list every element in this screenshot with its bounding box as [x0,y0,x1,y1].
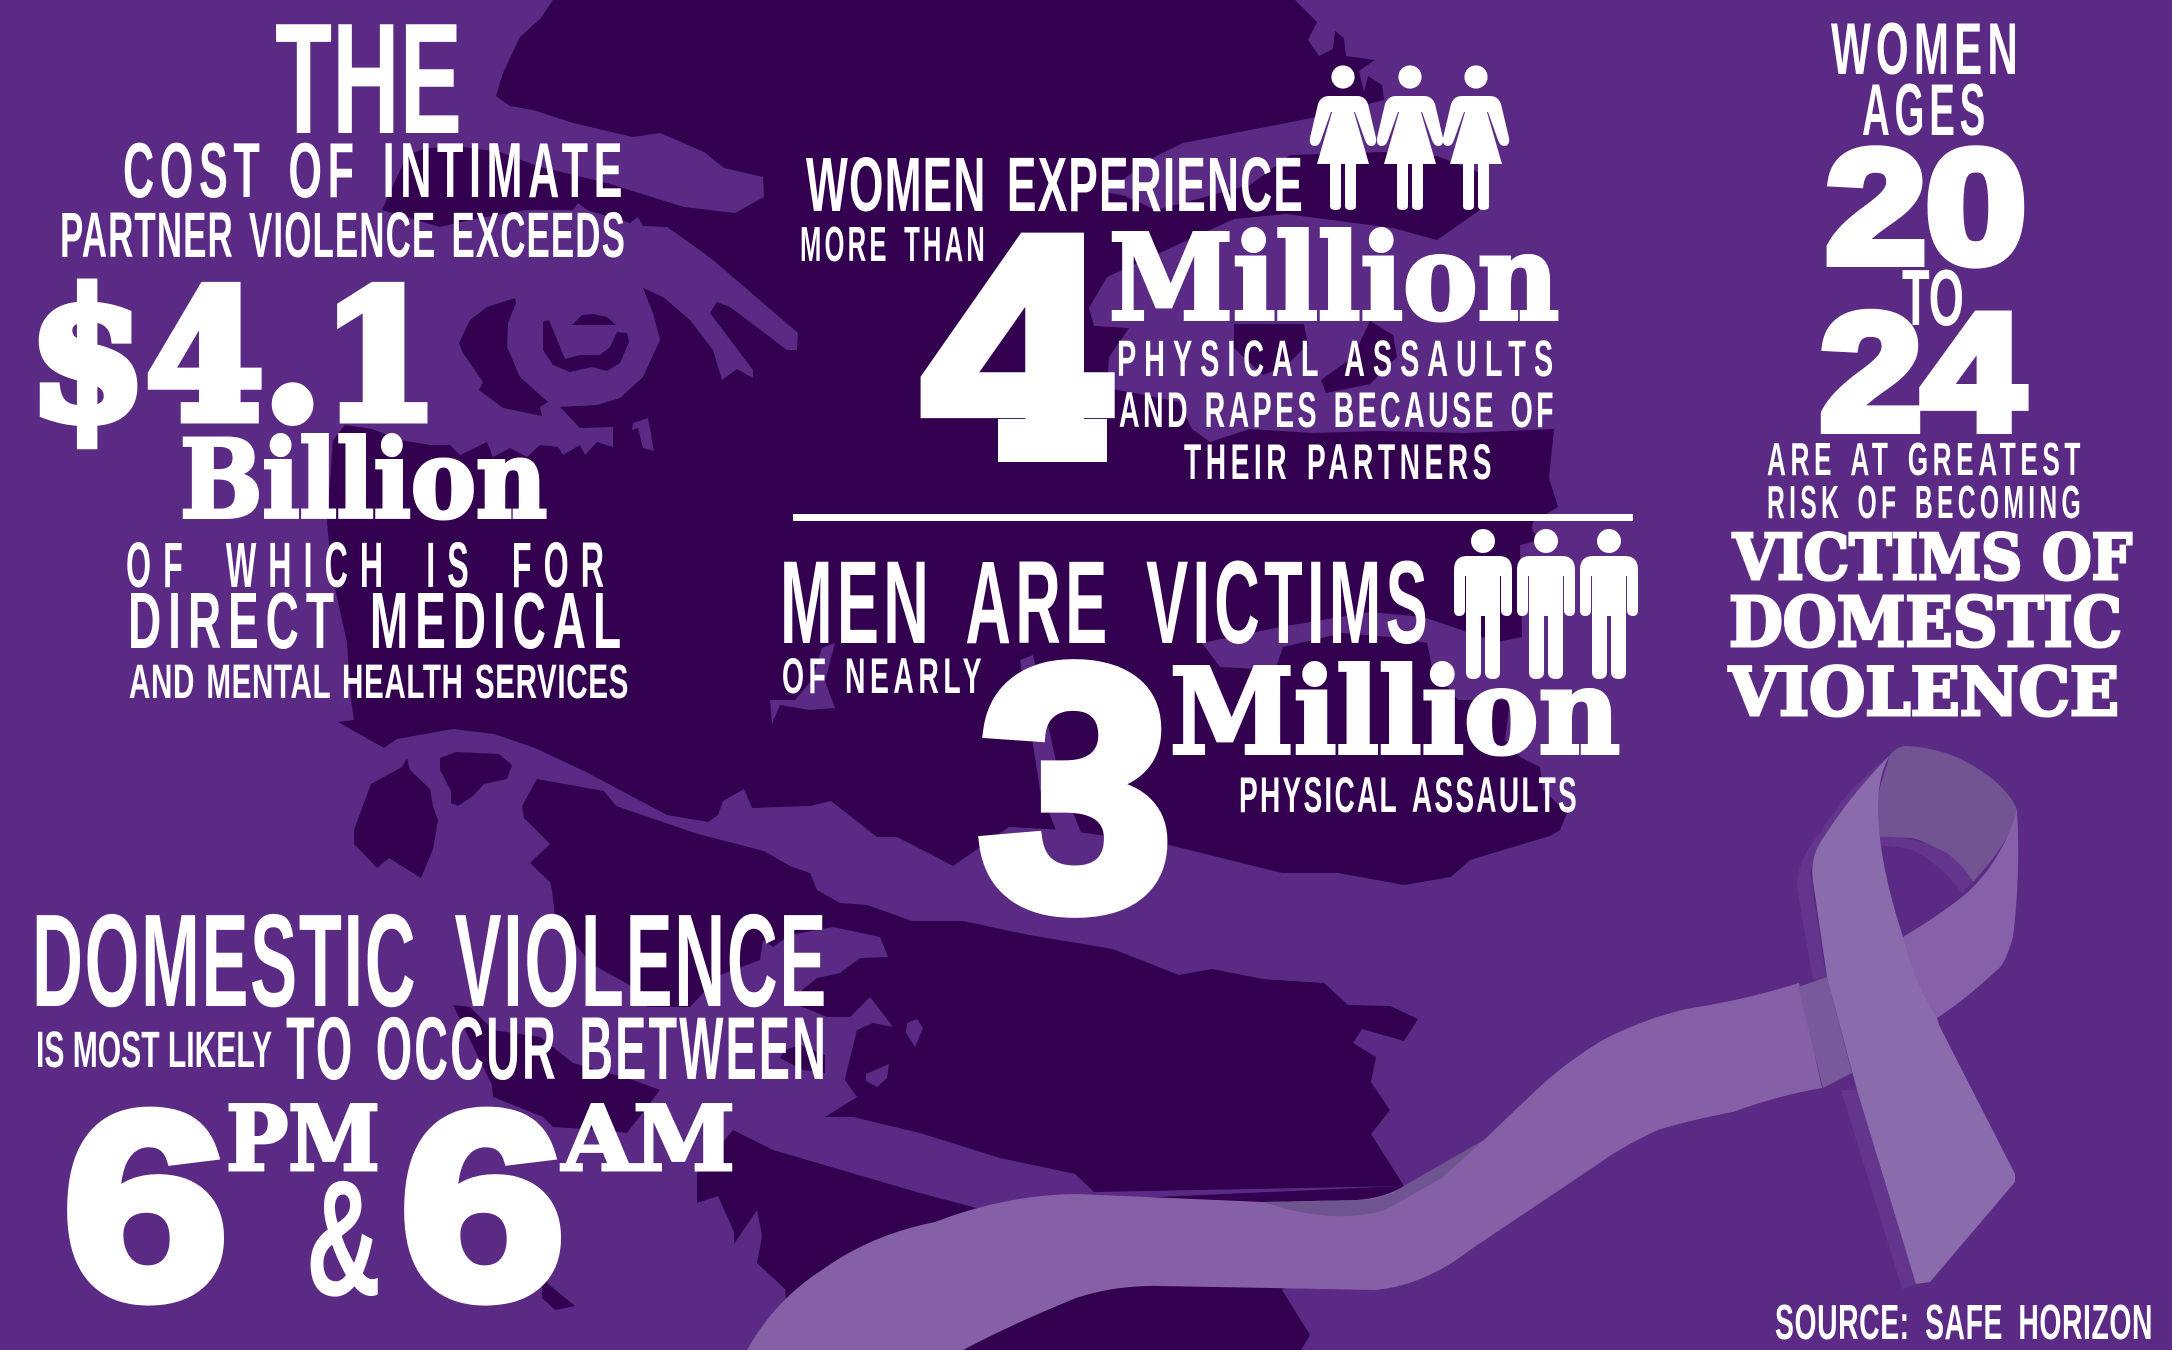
icons: three women [1310,65,1509,210]
ribbon: back loop [1877,746,2017,882]
ribbon: crossing shade [1798,977,1852,1088]
text: violence: VIOLENCE [1728,653,2119,731]
icons: three men [1454,529,1638,679]
text: physical assaults: PHYSICAL ASSAULTS [1117,330,1561,387]
figure: Million: Million [1109,208,1559,347]
text: of nearly: OF NEARLY [782,648,986,704]
figure: 3: 3 [978,596,1173,981]
text: of which is for: OF WHICH IS FOR [126,529,616,601]
panel: men statistic [780,529,1638,981]
panel: women statistic [800,65,1561,522]
label: AM: AM [561,1086,735,1192]
heading: domestic violence: DOMESTIC VIOLENCE [32,887,828,1034]
text: more than: MORE THAN [800,218,988,272]
text: mental health services: AND MENTAL HEALTH SERVICES [129,656,629,709]
figure: 4.1 dollars: $4.1 [29,253,439,460]
figure: Billion: Billion [180,417,547,543]
background: face silhouette [327,0,1700,1350]
text: and rapes because of: AND RAPES BECAUSE OF [1119,382,1557,438]
ribbon: inner shadow arc [1879,837,1973,893]
panel: time of occurrence [32,887,828,1350]
purple awareness ribbon [747,746,2018,1350]
text: direct medical: DIRECT MEDICAL [128,576,628,665]
text: victims of: VICTIMS OF [1732,520,2132,594]
text: physical assaults: PHYSICAL ASSAULTS [1239,767,1579,823]
text: their partners: THEIR PARTNERS [1184,434,1496,490]
ribbon: edge shadow [1797,755,1916,1289]
figure: 20: 20 [1826,117,2026,296]
panel: age risk [1728,9,2132,731]
heading: women experience: WOMEN EXPERIENCE [806,142,1304,228]
text: cost of intimate: COST OF INTIMATE [123,126,628,214]
text: partner violence exceeds: PARTNER VIOLENCE EXCEEDS [60,199,626,271]
label: PM: PM [226,1086,380,1192]
figure: 6: 6 [400,1058,565,1350]
divider rule [793,514,1633,521]
figure: 24: 24 [1820,280,2024,464]
ribbon: right loop [1903,810,2018,1018]
ribbon: tail [747,983,1822,1350]
text: ages: AGES [1862,70,1990,151]
ampersand: & [306,1146,381,1330]
text: to occur between: TO OCCUR BETWEEN [286,998,828,1098]
ribbon: fold shadow [1263,1140,1484,1216]
figure: Million: Million [1170,642,1620,781]
panel: cost of violence [29,0,629,709]
ribbon: front strand [1812,755,2015,1284]
text: women: WOMEN [1831,9,2023,90]
heading: men are victims: MEN ARE VICTIMS [780,537,1432,669]
text: is most likely: IS MOST LIKELY [36,1021,272,1078]
text: domestic: DOMESTIC [1729,583,2122,663]
figure: 4: 4 [923,173,1111,522]
text: to: TO [1902,253,1964,342]
figure: 6: 6 [63,1058,228,1350]
